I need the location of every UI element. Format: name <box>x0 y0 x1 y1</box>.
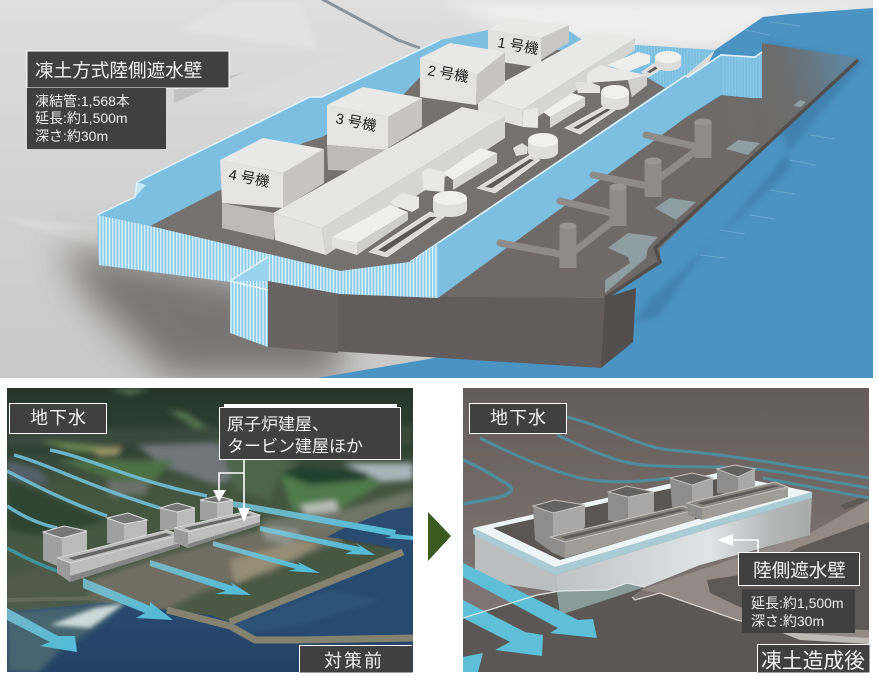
title label: frozen soil wall <box>27 51 229 88</box>
label: unit 1: 1 号機 <box>496 34 540 58</box>
reactor building 1 <box>488 25 569 66</box>
label: unit 2: 2 号機 <box>426 62 470 86</box>
quay deck <box>438 43 858 298</box>
title label: frozen soil wall: 凍土方式陸側遮水壁 <box>35 60 202 81</box>
spec box: wall length and depth <box>742 589 855 633</box>
label: after frozen soil formed: 凍土造成後 <box>761 650 865 673</box>
reactor and turbine buildings model <box>43 496 260 582</box>
label: before countermeasures <box>300 646 412 672</box>
sea-side pipes <box>500 118 712 268</box>
label: groundwater (before) <box>10 404 106 434</box>
groundwater arrows <box>7 450 413 652</box>
arrows passing under <box>463 563 597 672</box>
frozen wall block <box>473 473 812 615</box>
label: land-side impermeable wall: 陸側遮水壁 <box>753 560 846 581</box>
label: groundwater (after) <box>470 404 566 434</box>
low annex buildings <box>332 52 650 255</box>
groundwater stream lines <box>463 417 869 504</box>
label: groundwater (before): 地下水 <box>30 408 87 428</box>
lower turbine building <box>273 107 505 255</box>
land features <box>7 388 413 610</box>
reactor building 4 <box>220 138 324 240</box>
arrow: to reactor building <box>213 473 244 502</box>
panel: after frozen wall diagram <box>463 388 869 672</box>
spec box: wall specifications <box>27 88 166 149</box>
label: reactor and turbine buildings: 原子炉建屋、 <box>227 415 329 434</box>
reactor building 3 <box>327 87 422 172</box>
arrow: to turbine building <box>238 460 250 522</box>
sea <box>7 507 413 672</box>
spec box: wall length and depth: 深さ:約30m <box>751 613 824 629</box>
surface line <box>463 583 645 618</box>
ground shadow <box>60 245 340 378</box>
label: groundwater (after): 地下水 <box>490 408 547 428</box>
rear frozen wall, blue interior <box>97 25 715 243</box>
label: unit 3: 3 号機 <box>334 110 378 135</box>
label: before countermeasures: 対策前 <box>324 651 384 671</box>
panel: site overview illustration <box>0 0 878 378</box>
upper turbine building <box>478 32 635 127</box>
breakwaters <box>7 540 413 640</box>
spec box: wall specifications: 延長:約1,500m <box>35 110 128 126</box>
spec box: wall specifications: 深さ:約30m <box>35 128 108 144</box>
seaward frozen wall <box>410 52 762 298</box>
surf <box>7 602 125 672</box>
building models <box>533 465 788 558</box>
lower ground and harbour <box>463 495 869 672</box>
road <box>320 0 420 48</box>
front frozen wall, striped <box>97 215 438 347</box>
spec box: wall specifications: 凍結管:1,568本 <box>35 93 130 109</box>
sea <box>317 8 873 378</box>
harbour pools <box>605 100 806 293</box>
quay wall: dark front face <box>268 281 636 368</box>
spec box: wall length and depth: 延長:約1,500m <box>751 595 844 611</box>
reactor building 2 <box>420 43 505 105</box>
water intake pits <box>369 63 665 257</box>
storage tanks <box>433 51 681 217</box>
arrow: before to after <box>428 512 451 561</box>
site floor <box>150 50 665 271</box>
label: reactor and turbine buildings <box>220 404 400 460</box>
label: reactor and turbine buildings: タービン建屋ほか <box>227 437 363 456</box>
label: unit 4: 4 号機 <box>227 166 271 191</box>
label: land-side impermeable wall <box>738 552 860 586</box>
panel: before countermeasures photo <box>7 388 413 672</box>
arrow: points to wall <box>717 534 758 552</box>
